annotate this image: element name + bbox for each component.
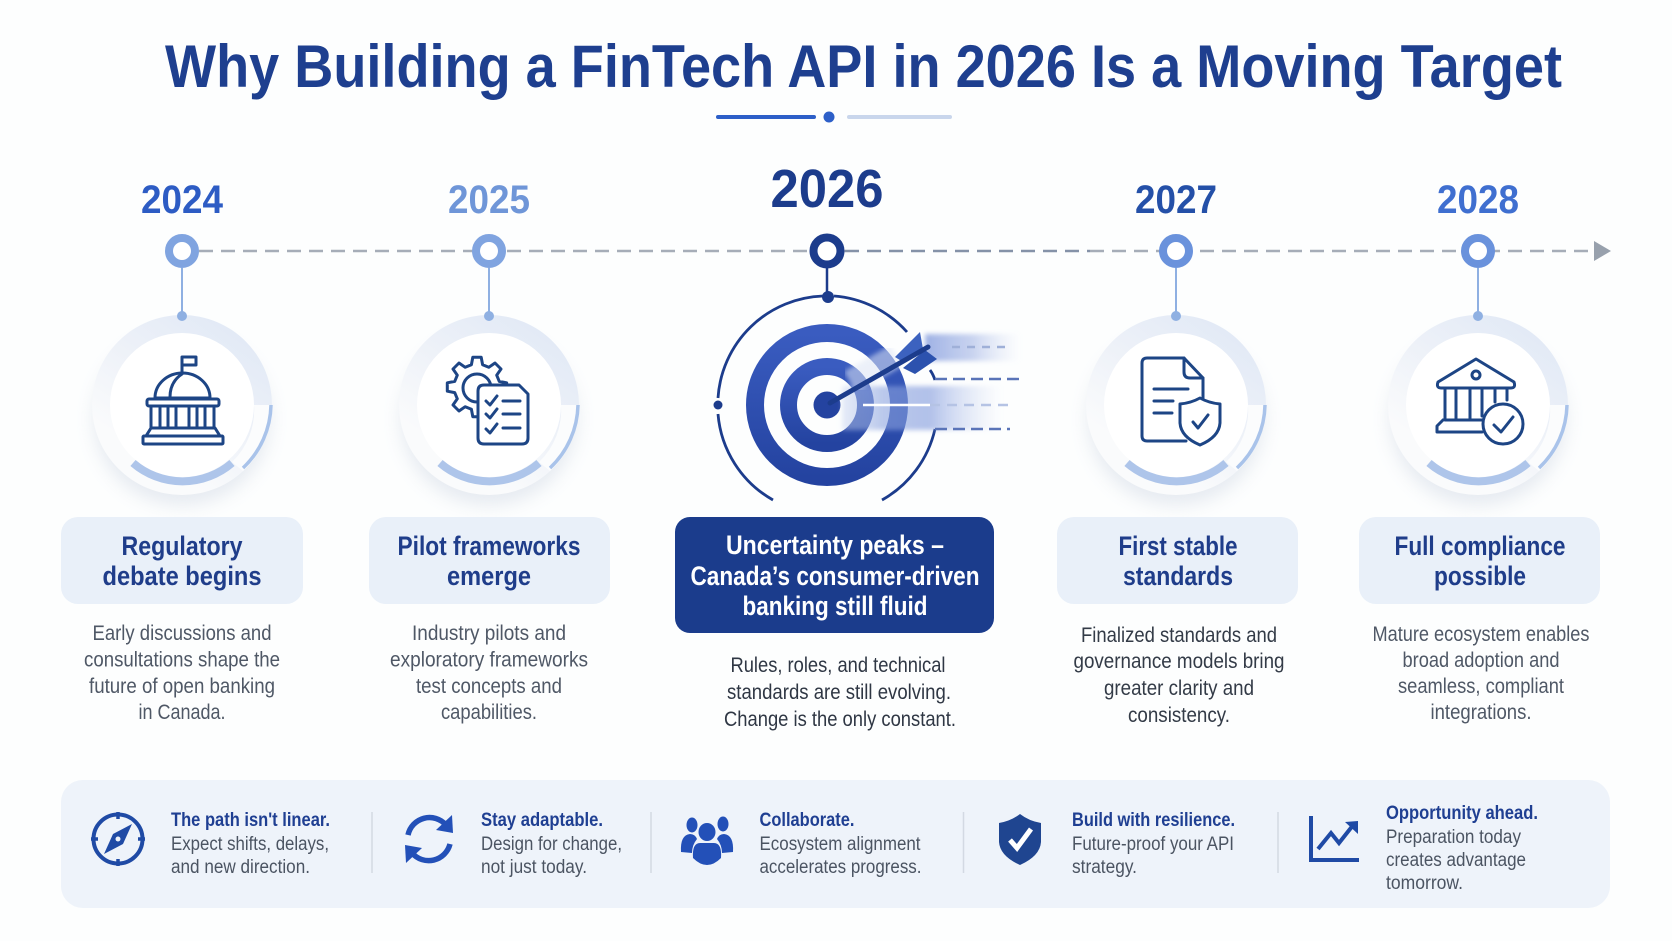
description 2028 [1372,623,1590,724]
description 2025: Industry pilots and [412,622,566,645]
label: full compliance [1359,517,1600,604]
text: opportunity ahead: Preparation today [1386,827,1521,848]
icon: sync arrows [405,815,453,863]
label: uncertainty peaks: banking still fluid [742,591,928,621]
label: full compliance: Full compliance [1394,531,1566,561]
text: stay adaptable: Design for change, [481,834,622,855]
description 2025: test concepts and [416,675,562,698]
bottom panel [61,780,1610,908]
label: pilot frameworks: emerge [447,561,531,591]
label: regulatory debate: debate begins [102,561,262,591]
text: build resilience [1072,810,1235,878]
title: Why Building a FinTech API in 2026 Is a Moving Target [165,33,1562,100]
description 2027: governance models bring [1074,650,1284,673]
year 2026 marker [770,159,884,296]
label: full compliance: possible [1434,561,1526,591]
description 2026: Change is the only constant. [724,708,956,731]
text: stay adaptable: Stay adaptable. [481,810,603,831]
icon circle: 2025 gear and checklist [399,311,579,505]
timeline axis with arrow [199,241,1611,261]
icon: people [681,816,733,865]
description 2026: standards are still evolving. [727,681,951,704]
text: stay adaptable [481,810,622,878]
icon: capitol building [143,357,223,444]
label: first stable: standards [1123,561,1233,591]
title underline [716,112,952,122]
label: first stable [1057,517,1298,604]
icon circle: 2027 document with shield [1086,311,1266,505]
text: build resilience: strategy. [1072,857,1137,878]
target illustration [714,291,1023,500]
description 2028: integrations. [1430,701,1532,724]
year 2025 marker: 2025 [448,178,530,222]
label: uncertainty peaks [675,517,994,633]
description 2024: consultations shape the [84,648,280,672]
description 2025: exploratory frameworks [390,648,588,672]
description 2025 [390,622,588,724]
year 2028 marker [1437,178,1519,316]
description 2024: in Canada. [138,701,226,724]
icon: compass [91,812,145,866]
text: collaborate: Ecosystem alignment [760,834,921,855]
text: opportunity ahead: tomorrow. [1386,873,1463,894]
text: build resilience: Future-proof your API [1072,834,1234,855]
text: collaborate: Collaborate. [760,810,854,831]
text: stay adaptable: not just today. [481,857,587,878]
target rings [755,333,899,477]
year 2026 marker: 2026 [770,159,884,219]
description 2027: consistency. [1128,704,1230,727]
label: pilot frameworks [369,517,610,604]
year 2027 marker: 2027 [1135,178,1217,222]
label: uncertainty peaks: Uncertainty peaks – [726,530,944,560]
text: build resilience: Build with resilience. [1072,810,1235,831]
year 2028 marker: 2028 [1437,178,1519,222]
icon: growth chart [1311,816,1359,860]
description 2028: Mature ecosystem enables [1372,623,1590,646]
motion streaks [925,334,1020,361]
label: uncertainty peaks: Canada’s consumer-driven [690,561,980,591]
icon: bank with check [1437,359,1523,444]
description 2024: future of open banking [89,675,275,698]
year 2024 marker [141,178,224,316]
label: pilot frameworks: Pilot frameworks [398,531,580,561]
text: path not linear: The path isn't linear. [171,810,330,831]
label: first stable: First stable [1118,531,1238,561]
description 2024 [84,622,280,724]
year 2024 marker: 2024 [141,178,224,222]
year 2027 marker [1135,178,1217,316]
description 2028: broad adoption and [1402,649,1560,672]
description 2028: seamless, compliant [1398,675,1564,698]
description 2026: Rules, roles, and technical [730,654,946,677]
arrow [830,332,937,403]
description 2027: greater clarity and [1104,677,1254,700]
description 2024: Early discussions and [92,622,272,645]
icon: shield [999,814,1041,865]
pale wedge along arrow [850,356,896,382]
text: collaborate: accelerates progress. [760,857,922,878]
text: opportunity ahead: creates advantage [1386,850,1526,871]
description 2027: Finalized standards and [1081,624,1277,647]
outer broken ring [718,296,935,500]
description 2027 [1074,624,1284,727]
text: opportunity ahead [1386,803,1538,894]
label: regulatory debate [61,517,303,604]
icon: gear and checklist [447,357,528,444]
text: opportunity ahead: Opportunity ahead. [1386,803,1538,824]
description 2025: capabilities. [441,701,537,724]
text: path not linear: Expect shifts, delays, [171,834,329,855]
text: path not linear: and new direction. [171,857,310,878]
icon circle: 2028 bank with check [1388,311,1568,505]
label: regulatory debate: Regulatory [122,531,242,561]
icon circle: 2024 capitol [92,311,272,505]
text: collaborate [760,810,922,878]
description 2026 [724,654,956,731]
year 2025 marker [448,178,530,316]
icon: document with shield [1142,358,1220,445]
text: path not linear [171,810,330,878]
